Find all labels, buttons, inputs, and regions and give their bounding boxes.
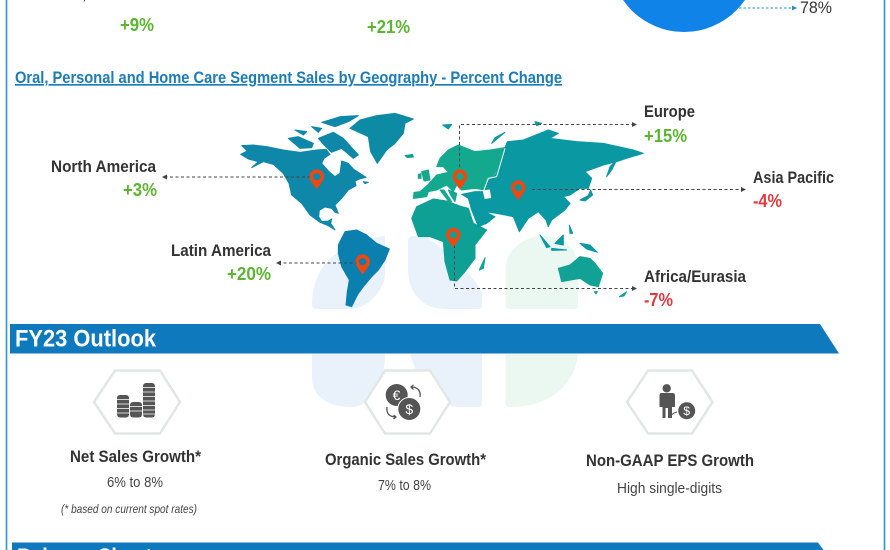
value: 6% to 8% xyxy=(107,475,163,491)
hexagon icon: currency exchange xyxy=(365,370,450,434)
region label: Asia Pacific xyxy=(753,169,834,211)
region label: Africa/Eurasia: Africa/Eurasia xyxy=(644,268,747,286)
region label: Africa/Eurasia xyxy=(644,268,747,310)
outlook item: organic sales growth xyxy=(325,370,487,494)
pin: Europe xyxy=(453,169,467,190)
pie leader line xyxy=(739,7,796,9)
hexagon icon: coin stacks xyxy=(94,370,180,434)
hexagon icon: currency exchange: $ xyxy=(405,401,413,417)
connector: Asia Pacific xyxy=(532,188,745,190)
value: oral personal home care change: +9% xyxy=(120,15,154,35)
background logo watermark xyxy=(312,236,578,407)
region label: North America xyxy=(51,158,157,200)
banner: FY23 Outlook xyxy=(10,324,839,354)
region label: Africa/Eurasia: -7% xyxy=(644,290,673,310)
outlook item: non-GAAP EPS growth xyxy=(586,370,754,497)
hexagon icon: currency exchange: € xyxy=(393,387,401,403)
region label: Latin America: +20% xyxy=(227,264,271,284)
heading: Net Sales Growth* xyxy=(70,448,202,466)
footnote: (* based on current spot rates) xyxy=(61,502,197,516)
hexagon icon: person and dollar coin: $ xyxy=(683,404,690,418)
hexagon icon: person and dollar coin xyxy=(627,370,712,434)
connector: Latin America xyxy=(277,262,358,264)
region label: North America: +3% xyxy=(123,180,157,200)
value: 7% to 8% xyxy=(378,478,431,494)
region label: North America: North America xyxy=(51,158,157,176)
heading: Non-GAAP EPS Growth xyxy=(586,452,754,470)
connector: Europe xyxy=(460,124,636,178)
region label: Asia Pacific: Asia Pacific xyxy=(753,169,834,187)
pin: Asia Pacific xyxy=(511,180,526,200)
pie slice xyxy=(610,0,758,32)
value: pet nutrition change: +21% xyxy=(367,17,410,37)
region label: Latin America: Latin America xyxy=(171,242,272,260)
Americas landmasses xyxy=(241,113,413,307)
connector: Africa/Eurasia xyxy=(454,245,636,288)
region label: Latin America xyxy=(171,242,272,284)
region label: Europe xyxy=(644,103,695,146)
region label: Europe: +15% xyxy=(644,126,687,146)
top segment labels and values xyxy=(62,0,438,37)
banner: FY23 Outlook: FY23 Outlook xyxy=(15,326,157,352)
banner: Balance Sheet (cropped) xyxy=(12,542,825,550)
pie chart (cropped) xyxy=(610,0,832,32)
pin: Africa xyxy=(446,228,461,248)
Europe, Africa, Asia, Oceania landmasses xyxy=(412,122,643,297)
outlook item: net sales growth xyxy=(61,370,202,516)
value: High single-digits xyxy=(617,481,722,497)
heading: sales by geography: Oral, Personal and Home Care Segment Sales by Geography - Percent Change xyxy=(15,69,562,87)
world map xyxy=(163,113,745,307)
region label: Asia Pacific: -4% xyxy=(753,191,782,211)
heading: Organic Sales Growth* xyxy=(325,451,487,469)
connector: North America xyxy=(163,176,316,178)
pin: Latin America xyxy=(355,254,370,275)
pin: North America xyxy=(309,169,324,189)
region label: Europe: Europe xyxy=(644,103,695,121)
